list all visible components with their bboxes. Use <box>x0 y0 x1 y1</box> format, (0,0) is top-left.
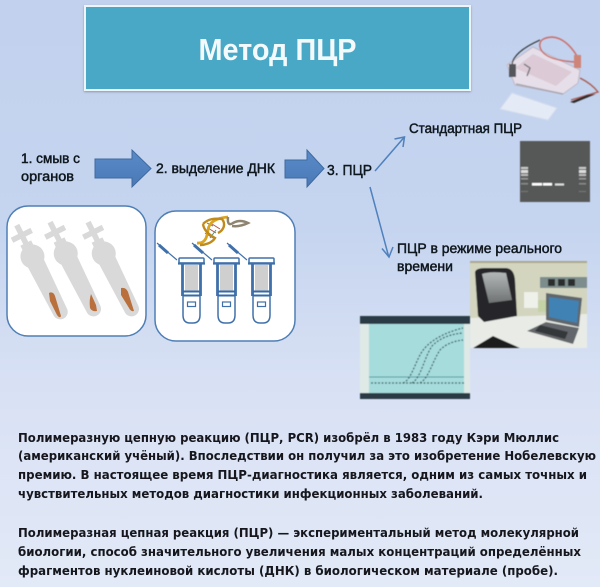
swab 2 <box>39 217 108 321</box>
label: standard PCR: Стандартная ПЦР <box>409 121 522 136</box>
step 1 label: 1. смыв с <box>21 151 80 166</box>
tube 1 <box>157 243 205 323</box>
tube 3 <box>227 243 275 323</box>
text block: definition of PCR: биологии, способ значительного увеличения малых концентраций определённых <box>18 545 581 559</box>
tube 2 <box>192 243 240 323</box>
arrow: to standard PCR <box>375 137 404 171</box>
text block: history of PCR: премию. В настоящее время ПЦР-диагностика является, одним из самых точных и <box>18 468 587 482</box>
chart: amplification plot <box>360 316 470 399</box>
arrow: step 2 to step 3 <box>285 150 324 187</box>
text block: history of PCR <box>18 431 596 501</box>
electrophoresis chamber photo <box>500 37 598 120</box>
title banner: Метод ПЦР <box>198 32 356 67</box>
label: real-time PCR: ПЦР в режиме реального <box>397 241 562 256</box>
label: real-time PCR <box>397 241 562 274</box>
arrow: step 1 to step 2 <box>95 150 151 187</box>
panel: swab tubes <box>6 206 146 336</box>
label: real-time PCR: времени <box>397 259 453 274</box>
text block: definition of PCR <box>18 526 581 578</box>
text block: definition of PCR: Полимеразная цепная реакция (ПЦР) — экспериментальный метод молекулярной <box>18 526 579 540</box>
arrow: to real-time PCR <box>370 187 393 257</box>
step 1 label: органов <box>21 169 74 184</box>
photo: real-time PCR instrument and laptop <box>470 261 587 348</box>
icon: DNA helix <box>197 217 248 245</box>
panel: DNA extraction tubes <box>155 211 295 341</box>
step 2 label: 2. выделение ДНК <box>156 161 275 176</box>
text block: history of PCR: Полимеразную цепную реакцию (ПЦР, PCR) изобрёл в 1983 году Кэри Мюллис <box>18 431 559 445</box>
step 1 label <box>21 151 80 184</box>
text block: history of PCR: чувствительных методов диагностики инфекционных заболеваний. <box>18 487 483 501</box>
title banner <box>85 6 470 90</box>
swab 1 <box>6 220 74 324</box>
step 3 label: 3. ПЦР <box>327 162 372 179</box>
text block: definition of PCR: фрагментов нуклеиновой кислоты (ДНК) в биологическом материале (пробе). <box>18 564 558 578</box>
swab 3 <box>77 217 146 321</box>
gel image <box>520 141 590 202</box>
